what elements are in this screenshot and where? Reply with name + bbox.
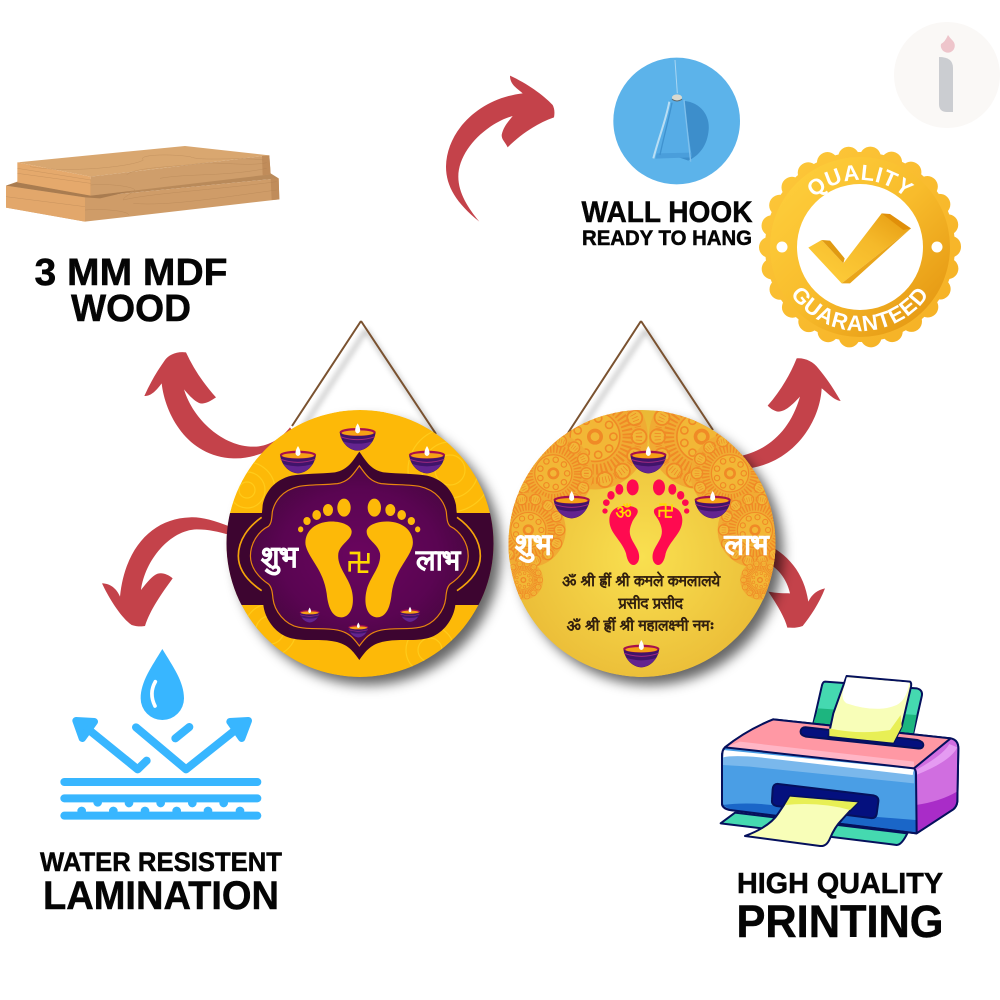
mantra text: प्रसीद प्रसीद bbox=[617, 593, 684, 616]
yellow footprints bbox=[298, 499, 420, 617]
icon: watermark logo bbox=[894, 22, 1000, 128]
mantra text bbox=[561, 570, 722, 639]
icon: water resistant layers bbox=[64, 649, 257, 816]
icon: quality guaranteed badge bbox=[759, 146, 961, 348]
label: wall hook ready to hang: WALL HOOK bbox=[582, 196, 753, 229]
label: high quality printing: HIGH QUALITY bbox=[737, 868, 943, 900]
arrow: to wood bbox=[144, 352, 297, 458]
icon: quality guaranteed badge: QUALITY bbox=[808, 164, 914, 195]
disc: yellow background bbox=[219, 410, 494, 677]
label: high quality printing: PRINTING bbox=[736, 896, 944, 947]
label: wall hook ready to hang: READY TO HANG bbox=[582, 227, 752, 250]
mantra text: ॐ श्री ह्रीं श्री कमले कमलालये bbox=[561, 570, 722, 594]
label: 3 mm mdf wood bbox=[34, 252, 228, 330]
icon: wall hook bbox=[613, 58, 740, 184]
hanging string: right plaque bbox=[568, 321, 719, 441]
label: wall hook ready to hang bbox=[582, 196, 753, 250]
arrow: to wall hook bbox=[446, 76, 554, 222]
icon: swastika small bbox=[659, 504, 672, 517]
arrow: to printing bbox=[758, 540, 825, 628]
label: water resistent lamination: LAMINATION bbox=[43, 874, 279, 918]
mantra text: ॐ श्री ह्रीं श्री महालक्ष्मी नमः bbox=[566, 615, 715, 639]
arrow: to quality badge bbox=[737, 358, 841, 469]
hanging string: left plaque bbox=[292, 321, 441, 441]
label: water resistent lamination bbox=[40, 847, 282, 918]
greeting: labh: लाभ bbox=[724, 524, 770, 568]
greeting: shubh: शुभ bbox=[261, 537, 300, 582]
icon: swastika bbox=[350, 553, 368, 572]
greeting: shubh: शुभ bbox=[515, 524, 554, 569]
icon: printer bbox=[721, 676, 958, 846]
panel: purple shubh labh plaque bbox=[219, 321, 501, 685]
lamps bbox=[280, 423, 445, 637]
label: water resistent lamination: WATER RESISTENT bbox=[40, 847, 282, 877]
plaque frame bbox=[238, 452, 480, 660]
icon: quality guaranteed badge: GUARANTEED bbox=[793, 288, 926, 332]
disc: gold mandala background bbox=[508, 410, 776, 677]
om symbol: ॐ bbox=[615, 500, 632, 526]
pink footprints bbox=[602, 479, 689, 565]
icon: wood planks bbox=[6, 146, 279, 222]
greeting: labh: लाभ bbox=[415, 540, 462, 584]
label: 3 mm mdf wood: WOOD bbox=[71, 288, 191, 330]
lamps bbox=[554, 446, 731, 667]
label: 3 mm mdf wood: 3 MM MDF bbox=[34, 252, 228, 294]
arrow: to lamination bbox=[102, 517, 230, 626]
panel: golden mantra plaque bbox=[491, 321, 792, 685]
label: high quality printing bbox=[736, 868, 944, 947]
